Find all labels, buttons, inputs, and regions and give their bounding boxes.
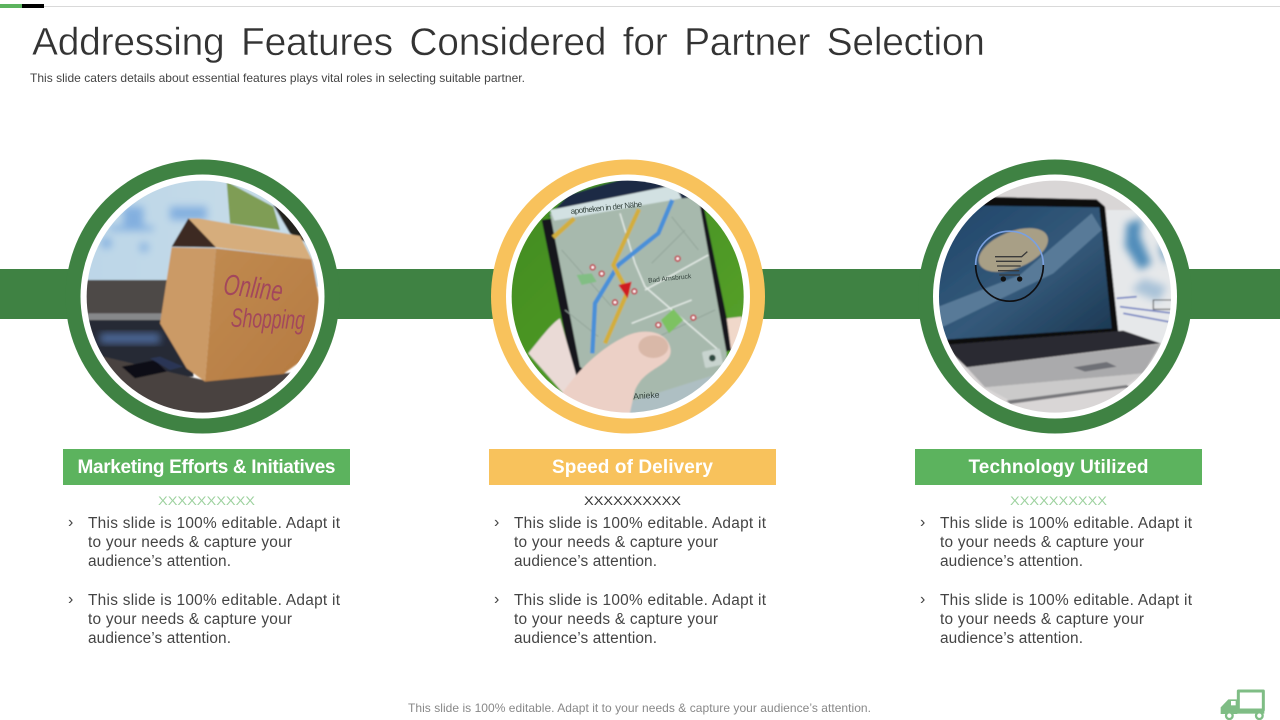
text block: technology: › [920, 514, 925, 531]
text block: technology: audience’s attention. [940, 553, 1083, 570]
text block: marketing: audience’s attention. [88, 630, 231, 647]
placeholder: marketing: XXXXXXXXXX [158, 494, 255, 508]
text block: delivery: This slide is 100% editable. Adapt it [514, 515, 767, 532]
photo caption: map labels: apotheken in der Nähe [570, 199, 643, 216]
text block: marketing: This slide is 100% editable. Adapt it [88, 592, 341, 609]
text block: delivery [494, 514, 767, 647]
photo caption: map labels [570, 199, 692, 401]
icon: shopping cart in ring [976, 231, 1043, 301]
text block: delivery: to your needs & capture your [514, 534, 718, 551]
text block: delivery: › [494, 591, 499, 608]
photo caption: map labels: Anieke [633, 389, 660, 401]
text block: technology: › [920, 591, 925, 608]
text block: technology: to your needs & capture your [940, 611, 1144, 628]
photo caption: map labels: Bad Arnsbruck [648, 273, 692, 285]
text block: marketing: to your needs & capture your [88, 611, 292, 628]
text block: technology: This slide is 100% editable. Adapt it [940, 515, 1193, 532]
text block: delivery: › [494, 514, 499, 531]
label: delivery: Speed of Delivery [552, 457, 713, 478]
text block: technology [920, 514, 1193, 647]
photo: phone map [505, 177, 752, 420]
label: marketing: Marketing Efforts & Initiatives [78, 457, 336, 478]
photo: online shopping box [80, 177, 327, 420]
title: Addressing Features Considered for Partner Selection [32, 21, 985, 64]
photo caption: box lettering [224, 274, 305, 334]
text block: marketing: audience’s attention. [88, 553, 231, 570]
text block: marketing: to your needs & capture your [88, 534, 292, 551]
footer note: This slide is 100% editable. Adapt it to your needs & capture your audience’s attention. [408, 701, 871, 715]
label: technology: Technology Utilized [968, 457, 1148, 478]
icon: delivery truck [1221, 691, 1264, 719]
photo: laptop with cart [939, 180, 1171, 413]
photo caption: box lettering: Online [222, 268, 285, 308]
text block: delivery: audience’s attention. [514, 630, 657, 647]
text block: marketing [68, 514, 341, 647]
horizontal connector band [0, 269, 1280, 319]
text block: technology: to your needs & capture your [940, 534, 1144, 551]
text block: marketing: › [68, 591, 73, 608]
photo caption: box lettering: Shopping [230, 303, 306, 335]
subtitle: This slide caters details about essential features plays vital roles in selecting suitable partner. [30, 71, 525, 85]
text block: marketing: This slide is 100% editable. Adapt it [88, 515, 341, 532]
text block: marketing: › [68, 514, 73, 531]
text block: technology: audience’s attention. [940, 630, 1083, 647]
label: marketing [63, 449, 350, 485]
label: delivery [489, 449, 776, 485]
placeholder: delivery: XXXXXXXXXX [584, 494, 681, 508]
text block: delivery: audience’s attention. [514, 553, 657, 570]
label: technology [915, 449, 1202, 485]
ring: technology [918, 160, 1192, 434]
text block: technology: This slide is 100% editable. Adapt it [940, 592, 1193, 609]
ring: marketing [66, 160, 340, 434]
panel: technology utilized [915, 160, 1202, 647]
text block: delivery: This slide is 100% editable. Adapt it [514, 592, 767, 609]
panel: speed of delivery [489, 160, 776, 647]
text block: delivery: to your needs & capture your [514, 611, 718, 628]
panel: marketing efforts [63, 160, 350, 647]
top accent rule [0, 4, 1280, 8]
ring: delivery [491, 160, 765, 434]
placeholder: technology: XXXXXXXXXX [1010, 494, 1107, 508]
